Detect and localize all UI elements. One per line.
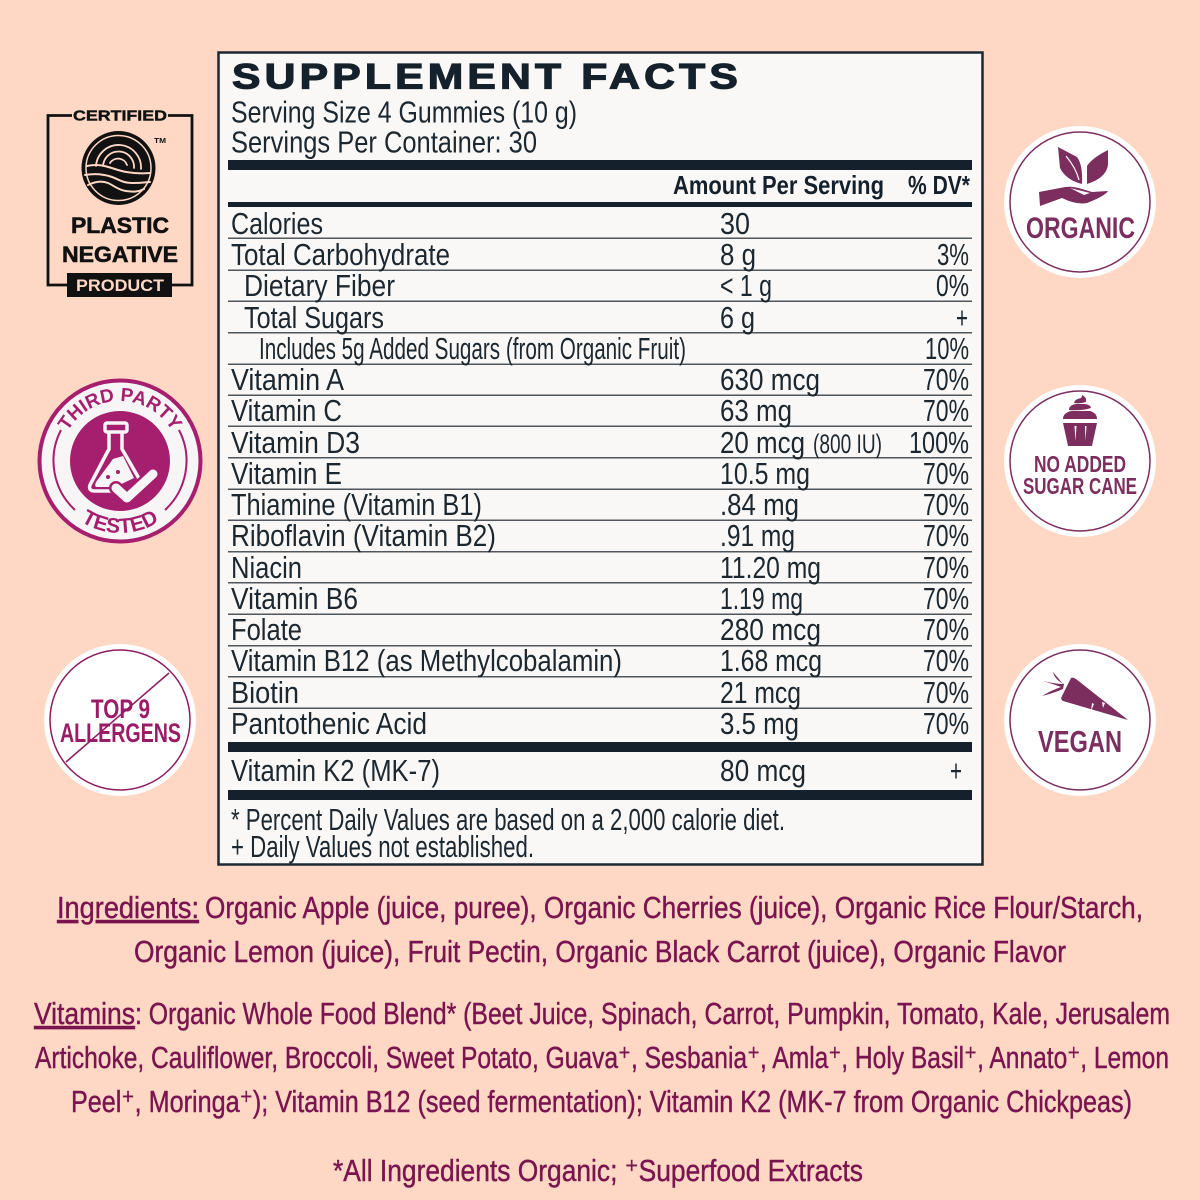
badge: third party tested: THIRD PARTY bbox=[57, 388, 183, 428]
row: vitamin D3: Vitamin D3 bbox=[231, 426, 360, 460]
row: vitamin A: 630 mcg bbox=[720, 363, 820, 397]
badge: certified plastic negative: PRODUCT bbox=[76, 276, 165, 295]
row: vitamin A: Vitamin A bbox=[231, 363, 345, 397]
badge: organic: ORGANIC bbox=[1026, 212, 1135, 245]
text block: ingredients: Ingredients: bbox=[57, 890, 199, 925]
badge: vegan: VEGAN bbox=[1038, 725, 1122, 759]
serving info: Serving Size 4 Gummies (10 g) bbox=[231, 96, 577, 130]
row: niacin bbox=[231, 551, 969, 585]
row: niacin: Niacin bbox=[231, 551, 302, 585]
serving info bbox=[231, 96, 577, 160]
row: thiamine: 70% bbox=[923, 488, 969, 522]
badge: organic bbox=[1004, 126, 1156, 278]
badge: third party tested bbox=[38, 378, 202, 544]
badge: free of top 9 allergens bbox=[44, 644, 196, 796]
row: total sugars: Total Sugars bbox=[244, 301, 384, 335]
row: vitamin E bbox=[231, 457, 969, 491]
row: biotin bbox=[231, 676, 969, 710]
row: vitamin D3 bbox=[231, 426, 969, 460]
row: biotin: 21 mcg bbox=[720, 676, 801, 710]
row: pantothenic acid: 3.5 mg bbox=[720, 707, 799, 741]
text block: ingredients bbox=[57, 890, 1143, 969]
footnotes: * Percent Daily Values are based on a 2,000 calorie diet. bbox=[231, 803, 785, 837]
column headers: % DV* bbox=[908, 170, 971, 200]
row: vitamin D3: 20 mcg bbox=[720, 426, 805, 460]
column headers: Amount Per Serving bbox=[673, 170, 884, 200]
row: vitamin A: 70% bbox=[923, 363, 969, 397]
row: vitamin K2: + bbox=[950, 754, 962, 788]
row: riboflavin: 70% bbox=[923, 519, 969, 553]
row: vitamin C: 63 mg bbox=[720, 394, 792, 428]
row: dietary fiber: 0% bbox=[936, 269, 969, 303]
row: vitamin C: Vitamin C bbox=[231, 394, 342, 428]
panel: supplement facts table bbox=[218, 52, 982, 864]
row: vitamin B6: 70% bbox=[923, 582, 969, 616]
row: vitamin B6 bbox=[231, 582, 969, 616]
row: total sugars: 6 g bbox=[720, 301, 755, 335]
row: vitamin B6: 1.19 mg bbox=[720, 582, 803, 616]
row: pantothenic acid: Pantothenic Acid bbox=[231, 707, 427, 741]
row: folate: Folate bbox=[231, 613, 302, 647]
row: biotin: 70% bbox=[923, 676, 969, 710]
row: thiamine bbox=[231, 488, 969, 522]
row: added sugars: 10% bbox=[925, 332, 969, 366]
text block: ingredients: Organic Lemon (juice), Fruit Pectin, Organic Black Carrot (juice), Organic Flavor bbox=[134, 934, 1066, 969]
row: riboflavin bbox=[231, 519, 969, 553]
row: dietary fiber bbox=[244, 269, 969, 303]
row: total carbohydrate: 3% bbox=[937, 238, 969, 272]
badge: no added sugar cane: SUGAR CANE bbox=[1023, 473, 1137, 499]
badge: certified plastic negative: NEGATIVE bbox=[62, 242, 178, 267]
row: dietary fiber: Dietary Fiber bbox=[244, 269, 395, 303]
row: vitamin D3: (800 IU) bbox=[813, 429, 882, 459]
row: calories bbox=[231, 207, 750, 241]
row: riboflavin: Riboflavin (Vitamin B2) bbox=[231, 519, 496, 553]
row: vitamin K2: 80 mcg bbox=[720, 754, 806, 788]
icon: wave and sun emblem bbox=[82, 131, 156, 205]
row: calories: Calories bbox=[231, 207, 323, 241]
row: vitamin B12 bbox=[231, 644, 969, 678]
row: calories: 30 bbox=[720, 207, 750, 241]
row: added sugars: Includes 5g Added Sugars (from Organic Fruit) bbox=[259, 332, 686, 366]
row: dietary fiber: < 1 g bbox=[720, 269, 772, 303]
row: folate: 70% bbox=[923, 613, 969, 647]
icon: carrot bbox=[1042, 672, 1128, 720]
badge: free of top 9 allergens: ALLERGENS bbox=[60, 718, 181, 748]
row: niacin: 11.20 mg bbox=[720, 551, 821, 585]
row: vitamin B12: 70% bbox=[923, 644, 969, 678]
row: vitamin K2: Vitamin K2 (MK-7) bbox=[231, 754, 440, 788]
row: vitamin E: 70% bbox=[923, 457, 969, 491]
row: folate bbox=[231, 613, 969, 647]
badge: certified plastic negative bbox=[48, 108, 192, 297]
row: riboflavin: .91 mg bbox=[720, 519, 795, 553]
badge: no added sugar cane bbox=[1004, 385, 1156, 537]
row: pantothenic acid bbox=[231, 707, 969, 741]
row: vitamin B12: Vitamin B12 (as Methylcobalamin) bbox=[231, 644, 622, 678]
row: total sugars: + bbox=[956, 301, 968, 335]
row: total carbohydrate: 8 g bbox=[720, 238, 756, 272]
text block: vitamins bbox=[34, 996, 1170, 1119]
badge: certified plastic negative: CERTIFIED bbox=[73, 108, 167, 124]
row: vitamin E: Vitamin E bbox=[231, 457, 342, 491]
row: total carbohydrate: Total Carbohydrate bbox=[231, 238, 450, 272]
row: niacin: 70% bbox=[923, 551, 969, 585]
row: pantothenic acid: 70% bbox=[923, 707, 969, 741]
row: vitamin C: 70% bbox=[923, 394, 969, 428]
row: total sugars bbox=[244, 301, 968, 335]
text block: vitamins: Vitamins bbox=[34, 996, 135, 1031]
icon: cupcake bbox=[1063, 395, 1097, 446]
serving info: Servings Per Container: 30 bbox=[231, 126, 537, 160]
badge: certified plastic negative: TM bbox=[154, 138, 166, 145]
row: vitamin D3: 100% bbox=[909, 426, 969, 460]
row: total carbohydrate bbox=[231, 238, 969, 272]
icon: leaves and hand bbox=[1039, 147, 1108, 206]
badge: certified plastic negative: PLASTIC bbox=[71, 213, 169, 238]
row: vitamin B6: Vitamin B6 bbox=[231, 582, 358, 616]
heading: supplement facts: SUPPLEMENT FACTS bbox=[232, 56, 742, 96]
row: vitamin A bbox=[231, 363, 969, 397]
badge: vegan bbox=[1004, 644, 1156, 796]
icon: flask with check bbox=[90, 423, 153, 498]
row: vitamin B12: 1.68 mcg bbox=[720, 644, 822, 678]
row: biotin: Biotin bbox=[231, 676, 299, 710]
badge: free of top 9 allergens: TOP 9 bbox=[91, 694, 150, 724]
footnotes bbox=[231, 803, 785, 864]
row: thiamine: .84 mg bbox=[720, 488, 799, 522]
row: thiamine: Thiamine (Vitamin B1) bbox=[231, 488, 482, 522]
row: vitamin E: 10.5 mg bbox=[720, 457, 810, 491]
footnote: organic and superfood: *All Ingredients Organic; ⁺Superfood Extracts bbox=[333, 1153, 863, 1188]
footnotes: + Daily Values not established. bbox=[231, 830, 534, 864]
row: vitamin C bbox=[231, 394, 969, 428]
badge: third party tested: TESTED bbox=[85, 509, 156, 533]
row: vitamin K2 bbox=[231, 754, 962, 788]
row: folate: 280 mcg bbox=[720, 613, 821, 647]
badge: no added sugar cane: NO ADDED bbox=[1034, 451, 1126, 477]
